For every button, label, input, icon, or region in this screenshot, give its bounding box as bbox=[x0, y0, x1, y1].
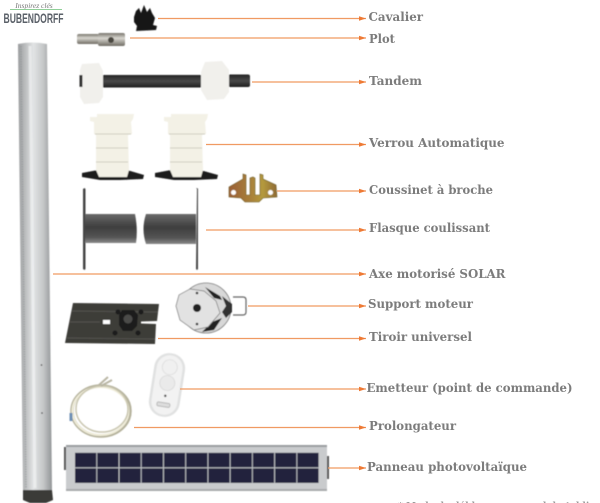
label: Emetteur (point de commande): Emetteur (point de commande) bbox=[366, 381, 572, 395]
icon: Coussinet à broche bbox=[229, 174, 277, 202]
icon: Cavalier bbox=[134, 5, 157, 31]
icon: Flasque coulissant bbox=[83, 188, 198, 270]
logo: Bubendorff: Inspirez clés bbox=[14, 1, 53, 10]
icon: Panneau photovoltaïque bbox=[64, 445, 329, 491]
icon: Prolongateur cable bbox=[70, 377, 130, 436]
label: Panneau photovoltaïque: Panneau photovoltaïque bbox=[367, 460, 527, 474]
arrow: Flasque coulissant bbox=[206, 229, 366, 231]
arrow: Tandem bbox=[252, 81, 366, 83]
logo: Bubendorff: BUBENDORFF bbox=[4, 10, 64, 26]
arrow: Panneau photovoltaïque bbox=[328, 467, 366, 469]
arrow: Support moteur bbox=[248, 305, 366, 307]
label: Axe motorisé SOLAR: Axe motorisé SOLAR bbox=[368, 267, 506, 281]
logo: Bubendorff bbox=[4, 1, 64, 26]
icon: Tiroir universel bbox=[65, 303, 159, 344]
icon: Tandem bbox=[80, 61, 250, 104]
label: Prolongateur: Prolongateur bbox=[369, 419, 457, 433]
icon: Support moteur bbox=[176, 283, 246, 333]
arrow: Plot bbox=[130, 37, 366, 39]
label: Flasque coulissant: Flasque coulissant bbox=[369, 221, 490, 235]
label: Coussinet à broche: Coussinet à broche bbox=[369, 183, 493, 197]
label: Tandem: Tandem bbox=[369, 74, 422, 88]
label: Support moteur: Support moteur bbox=[368, 297, 474, 311]
arrow: Tiroir universel bbox=[158, 338, 366, 340]
label: Tiroir universel: Tiroir universel bbox=[369, 330, 472, 344]
arrow: Cavalier bbox=[158, 18, 366, 20]
icon: Axe motorisé SOLAR tube bbox=[18, 42, 53, 503]
icon: Emetteur remote bbox=[147, 351, 187, 419]
label: Cavalier: Cavalier bbox=[368, 10, 424, 24]
arrow: Coussinet à broche bbox=[277, 190, 366, 192]
arrow: Prolongateur bbox=[134, 426, 366, 428]
label: Plot: Plot bbox=[369, 32, 395, 46]
arrow: Axe motorisé SOLAR bbox=[53, 273, 366, 275]
icon: Verrou Automatique bbox=[82, 114, 218, 180]
arrow: Emetteur bbox=[180, 388, 366, 390]
label: Verrou Automatique: Verrou Automatique bbox=[368, 136, 505, 150]
icon: Plot bbox=[77, 33, 125, 46]
arrow: Verrou Automatique bbox=[206, 144, 366, 146]
